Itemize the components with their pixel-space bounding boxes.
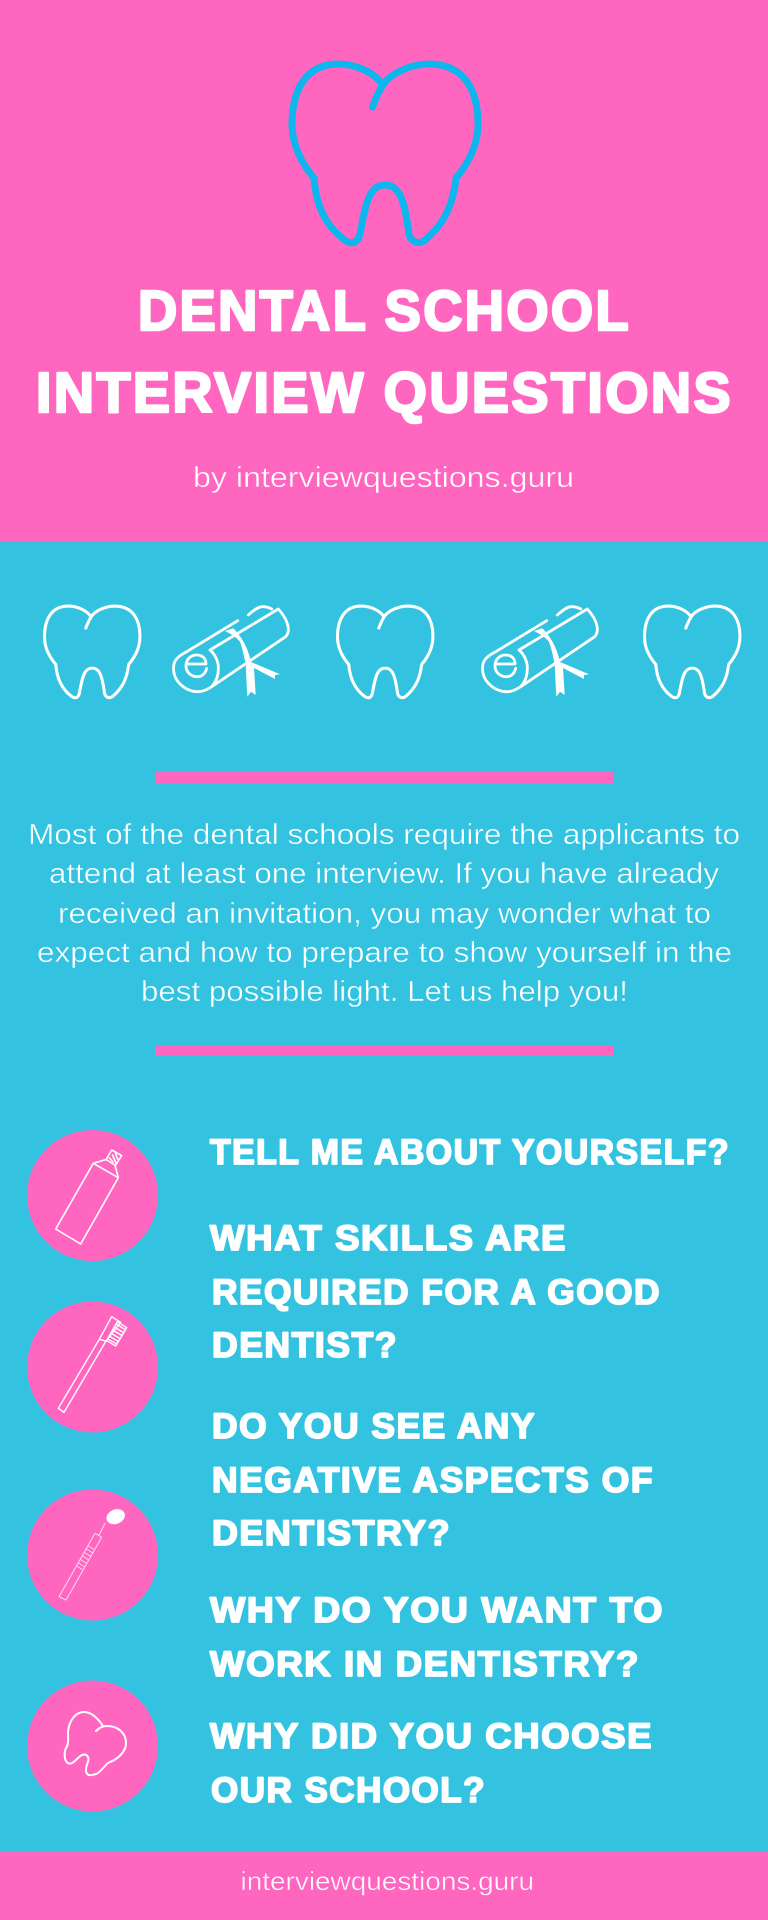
icon: diploma scroll 1 (174, 607, 288, 697)
icon: large blue tooth (292, 64, 478, 243)
question 1: TELL ME ABOUT YOURSELF? (210, 1133, 730, 1172)
question 4 (210, 1591, 664, 1684)
intro text: Most of the dental schools require the applicants to (28, 819, 740, 851)
question 5 (210, 1717, 653, 1810)
panel: main background (0, 542, 768, 1852)
question 3: NEGATIVE ASPECTS OF (212, 1461, 654, 1500)
question 3 (212, 1407, 654, 1553)
icon: tooth 3 (644, 606, 740, 698)
intro text: attend at least one interview. If you have already (49, 858, 720, 890)
question 2: REQUIRED FOR A GOOD (212, 1273, 661, 1312)
question 3: DO YOU SEE ANY (212, 1407, 536, 1446)
question 2: DENTIST? (212, 1326, 398, 1365)
intro text: expect and how to prepare to show yourself in the (37, 937, 732, 969)
question 4: WORK IN DENTISTRY? (210, 1645, 640, 1684)
panel: header (0, 0, 768, 542)
question 3: DENTISTRY? (212, 1514, 451, 1553)
intro text (28, 819, 740, 1008)
intro text: best possible light. Let us help you! (141, 976, 628, 1008)
icon: diploma scroll 2 (483, 607, 597, 697)
question 5: WHY DID YOU CHOOSE (210, 1717, 653, 1756)
footer: interviewquestions.guru (240, 1866, 534, 1896)
footer (0, 1852, 768, 1920)
title: DENTAL SCHOOL (138, 279, 631, 343)
title: INTERVIEW QUESTIONS (36, 361, 733, 425)
icon: tooth 1 (44, 606, 140, 698)
question 5: OUR SCHOOL? (211, 1771, 486, 1810)
question 4: WHY DO YOU WANT TO (210, 1591, 664, 1630)
intro text: received an invitation, you may wonder what to (58, 898, 711, 930)
icon: dental mirror circle (27, 1490, 158, 1620)
icon: toothbrush circle (27, 1302, 158, 1432)
icon: toothpaste circle (27, 1130, 158, 1261)
subtitle: by interviewquestions.guru (193, 462, 574, 494)
question 2: WHAT SKILLS ARE (210, 1219, 567, 1258)
title (36, 279, 733, 425)
question 2 (210, 1219, 661, 1365)
icon: tooth 2 (337, 606, 433, 698)
icon row (44, 606, 740, 698)
icon: rotated tooth circle (27, 1680, 158, 1812)
